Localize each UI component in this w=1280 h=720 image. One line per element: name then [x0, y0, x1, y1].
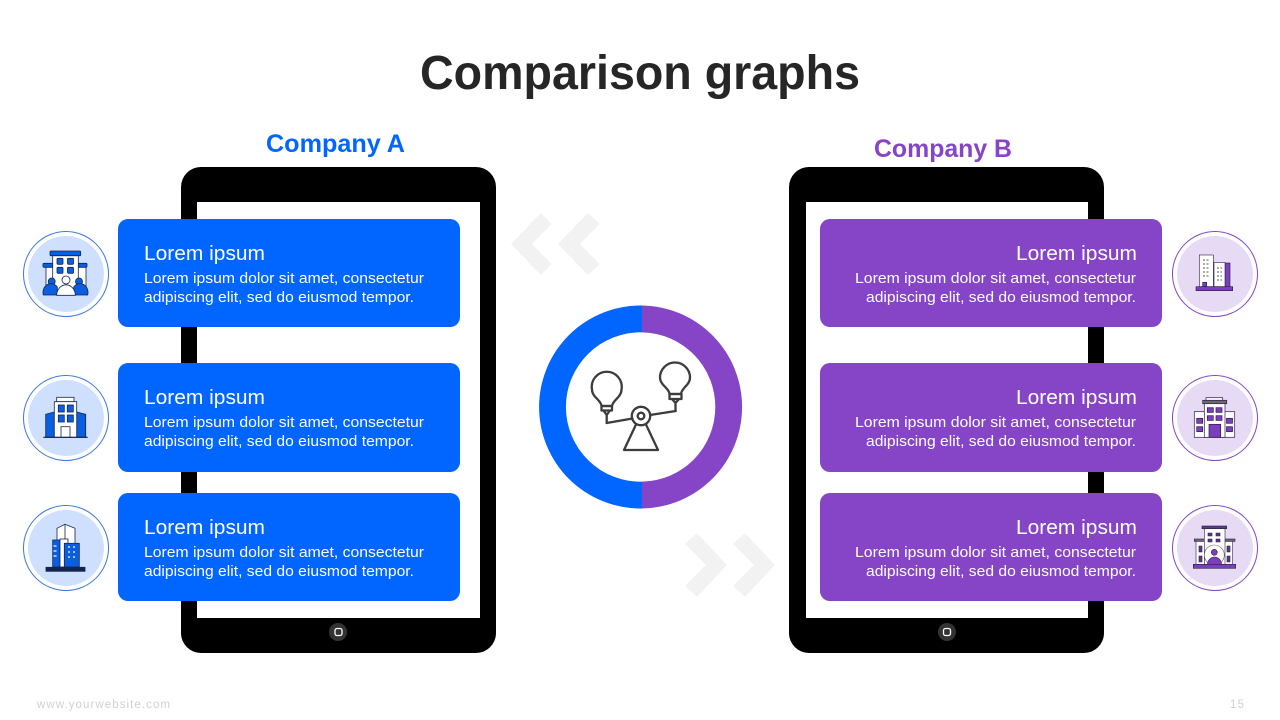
card: Company A item 1: Lorem ipsum [144, 243, 265, 265]
icon: balance with two light bulbs [592, 363, 690, 450]
arrow: right chevrons [685, 533, 775, 597]
footer: page number: 15 [1230, 699, 1244, 711]
card: Company A item 3: Lorem ipsum dolor sit amet, consectetur [144, 544, 424, 561]
heading: Company B: Company B [874, 135, 1012, 163]
card: Company A item 3: adipiscing elit, sed do eiusmod tempor. [144, 563, 414, 580]
card: Company B item 2: Lorem ipsum [1016, 387, 1137, 409]
card: Company A item 3: Lorem ipsum [144, 517, 265, 539]
card: Company B item 1 [820, 219, 1162, 327]
icon: city towers [24, 506, 108, 590]
tablet: Company A [181, 167, 496, 653]
card: Company B item 2: adipiscing elit, sed do eiusmod tempor. [866, 433, 1136, 450]
card: Company A item 3 [118, 493, 460, 601]
card: Company A item 2: adipiscing elit, sed do eiusmod tempor. [144, 433, 414, 450]
icon: purple office with person [1172, 506, 1258, 590]
card: Company B item 1: Lorem ipsum dolor sit amet, consectetur [855, 270, 1136, 287]
card: Company B item 2: Lorem ipsum dolor sit amet, consectetur [855, 414, 1136, 431]
card: Company A item 2: Lorem ipsum [144, 387, 265, 409]
title: Comparison graphs [420, 47, 860, 100]
card: Company B item 3: adipiscing elit, sed do eiusmod tempor. [866, 563, 1136, 580]
icon: purple towers [1172, 232, 1258, 316]
card: Company B item 2 [820, 363, 1162, 472]
card: Company A item 1 [118, 219, 460, 327]
card: Company B item 1: Lorem ipsum [1016, 243, 1137, 265]
icon: office with people [24, 232, 108, 316]
heading: Company A: Company A [266, 130, 405, 158]
tablet: Company B [789, 167, 1104, 653]
icon: purple office [1172, 376, 1258, 460]
card: Company B item 1: adipiscing elit, sed do eiusmod tempor. [866, 289, 1136, 306]
card: Company B item 3: Lorem ipsum dolor sit amet, consectetur [855, 544, 1136, 561]
card: Company A item 1: Lorem ipsum dolor sit amet, consectetur [144, 270, 424, 287]
card: Company B item 3 [820, 493, 1162, 601]
card: Company A item 2: Lorem ipsum dolor sit amet, consectetur [144, 414, 424, 431]
card: Company B item 3: Lorem ipsum [1016, 517, 1137, 539]
card: Company A item 2 [118, 363, 460, 472]
donut: comparison ring [539, 306, 742, 508]
card: Company A item 1: adipiscing elit, sed do eiusmod tempor. [144, 289, 414, 306]
arrow: left chevrons [511, 213, 600, 275]
icon: office block [24, 376, 108, 460]
footer: website: www.yourwebsite.com [36, 699, 170, 711]
